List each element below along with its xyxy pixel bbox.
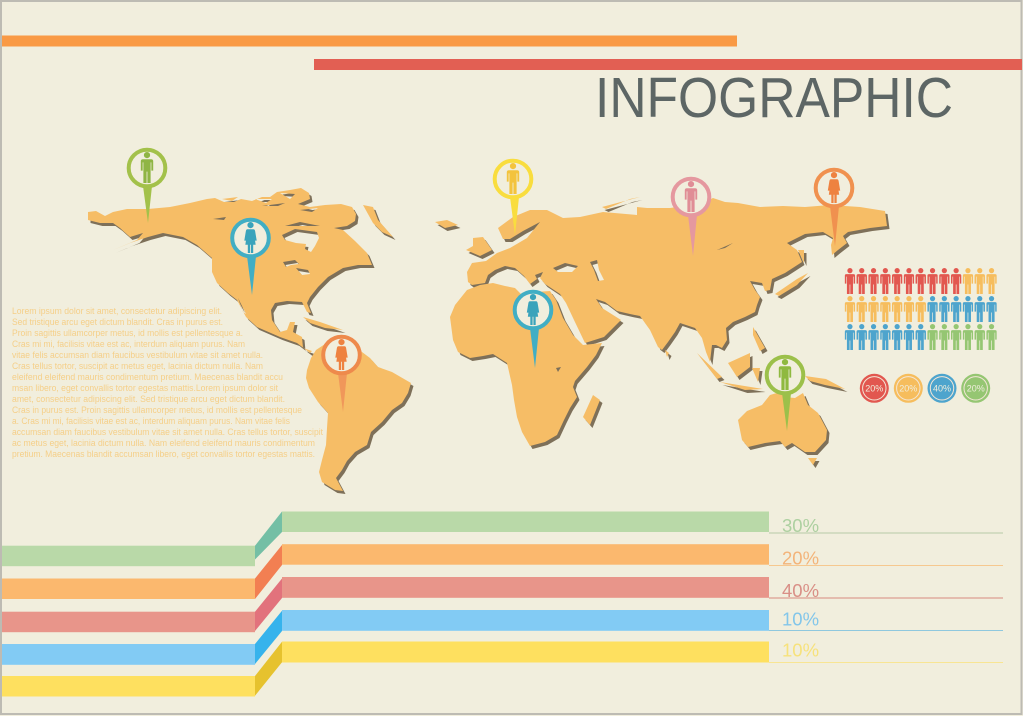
- yellow circle 20%: 20%: [899, 384, 917, 394]
- red circle 20%: 20%: [865, 384, 883, 394]
- body text block: [12, 306, 324, 459]
- row 1: ten red, three yellow: [845, 268, 997, 294]
- body text block: amet, consectetur adipiscing elit. Sed tristique arcu eget dictum blandit.: [12, 394, 285, 404]
- body text block: a. Cras mi mi, facilisis vitae est ac, interdum aliquam purus. Nam vitae felis: [12, 416, 291, 426]
- percentage circles: [860, 374, 990, 403]
- row 3: seven blue, six green: [845, 324, 997, 350]
- body text block: Sed tristique arcu eget dictum blandit. Cras in purus est.: [12, 317, 223, 327]
- pin: Alaska, green man: [129, 150, 165, 223]
- ribbon: green 30%: 30%: [782, 515, 819, 536]
- body text block: pretium. Maecenas blandit accumsan libero, eget convallis tortor egestas mattis.: [12, 449, 315, 459]
- pin: Africa, teal woman: [515, 292, 551, 368]
- pin: South America, orange woman: [323, 337, 360, 412]
- title: INFOGRAPHIC: [595, 66, 953, 130]
- green circle 20%: 20%: [967, 384, 985, 394]
- pictogram grid: [845, 268, 997, 350]
- body text block: eleifend eleifend mauris condimentum pretium. Maecenas blandit accu: [12, 372, 283, 382]
- world map: [88, 188, 890, 494]
- ribbon: orange 20%: [2, 544, 1003, 599]
- body text block: ac metus eget, lacinia dictum nulla. Nam eleifend eleifend mauris condimentum: [12, 438, 315, 448]
- body text block: Cras mi mi, facilisis vitae est ac, interdum aliquam purus. Nam: [12, 339, 245, 349]
- body text block: Lorem ipsum dolor sit amet, consectetur adipiscing elit.: [12, 306, 222, 316]
- row 2: seven yellow, six blue: [845, 296, 997, 322]
- top orange bar: [2, 36, 737, 46]
- body text block: Cras tellus tortor, suscipit ac metus eget, lacinia dictum nulla. Nam: [12, 361, 263, 371]
- body text block: msan libero, eget convallis tortor egestas mattis.Lorem ipsum dolor sit: [12, 383, 279, 393]
- pin: Scandinavia, yellow man: [495, 161, 531, 235]
- ribbon: orange 20%: 20%: [782, 548, 819, 568]
- blue circle 40%: 40%: [933, 384, 951, 394]
- body text block: vitae felis accumsan diam faucibus vestibulum vitae sit amet nulla.: [12, 350, 263, 360]
- pin: Indonesia, green man: [767, 357, 803, 431]
- body text block: Proin sagittis ullamcorper metus, id mollis est pellentesque a.: [12, 328, 243, 338]
- ribbon: yellow 10%: 10%: [782, 640, 819, 660]
- ribbon: green 30%: [2, 512, 1003, 566]
- ribbon: blue 10%: [2, 608, 1003, 665]
- pin: Far East, orange woman: [816, 170, 852, 246]
- ribbon: red 40%: [2, 577, 1003, 632]
- ribbon: blue 10%: 10%: [782, 608, 819, 630]
- ribbon: red 40%: 40%: [782, 580, 819, 601]
- top red bar: [314, 59, 1022, 70]
- body text block: Cras in purus est. Proin sagittis ullamcorper metus, id mollis est pellentesque: [12, 405, 302, 415]
- body text block: accumsan diam faucibus vestibulum vitae sit amet nulla. Cras tellus tortor, suscipit: [12, 427, 324, 437]
- pin: Russia, pink man: [673, 179, 709, 256]
- ribbon: yellow 10%: [2, 640, 1003, 696]
- pin: North America, teal woman: [232, 220, 269, 295]
